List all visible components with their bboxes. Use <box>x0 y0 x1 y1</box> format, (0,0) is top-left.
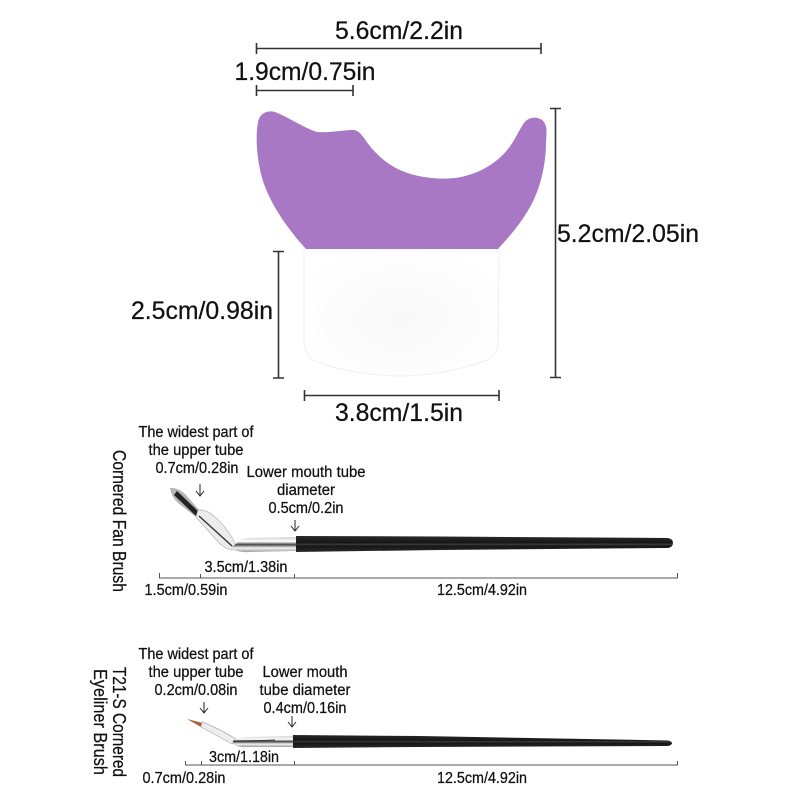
annotation: lower mouth tube, eyeliner brush: 0.4cm/0.16in <box>264 700 346 717</box>
annotation: upper tube width, fan brush: 0.7cm/0.28in <box>156 460 238 477</box>
cornered eyeliner brush illustration <box>187 719 672 748</box>
annotation: lower mouth tube, eyeliner brush: tube diameter <box>260 682 350 699</box>
handle <box>293 735 672 748</box>
dimension: base width 3.8cm: 3.8cm/1.5in <box>335 399 463 427</box>
dimension: base height 2.5cm: 2.5cm/0.98in <box>131 297 273 325</box>
angled ferrule <box>201 722 236 744</box>
annotation: upper tube width, fan brush: The widest part of <box>138 424 254 441</box>
dimension scale: eyeliner brush <box>142 749 678 787</box>
dimension scale: fan brush: 1.5cm/0.59in <box>144 582 228 599</box>
dimension scale: eyeliner brush: 12.5cm/4.92in <box>437 770 527 787</box>
straight ferrule <box>232 736 293 747</box>
dimension: total width 5.6cm <box>256 17 541 54</box>
dimension scale: fan brush: 3.5cm/1.38in <box>204 559 288 576</box>
label: Cornered Fan Brush: Cornered Fan Brush <box>109 450 129 592</box>
purple crescent <box>257 111 547 249</box>
label: T21-S Cornered Eyeliner Brush: T21-S Cornered <box>109 667 129 777</box>
bristles <box>170 488 200 517</box>
annotation: upper tube width, eyeliner brush: 0.2cm/0.08in <box>154 682 238 699</box>
annotation: lower mouth tube, fan brush: Lower mouth tube <box>246 464 366 481</box>
straight ferrule <box>230 537 296 552</box>
annotation: upper tube width, eyeliner brush: the upper tube <box>148 664 244 681</box>
annotation: lower mouth tube, eyeliner brush: Lower mouth <box>262 664 348 681</box>
purple and white eye shield <box>257 111 547 376</box>
label: T21-S Cornered Eyeliner Brush: Eyeliner Brush <box>90 669 110 775</box>
handle <box>296 536 673 552</box>
dimension: base height 2.5cm <box>131 252 284 378</box>
dimension: total height 5.2cm <box>550 108 699 378</box>
dimension: total width 5.6cm: 5.6cm/2.2in <box>335 17 463 45</box>
dimension: total height 5.2cm: 5.2cm/2.05in <box>557 220 699 248</box>
angled ferrule <box>196 510 236 550</box>
annotation: upper tube width, fan brush: the upper tube <box>148 442 244 459</box>
annotation: lower mouth tube, fan brush: 0.5cm/0.2in <box>268 500 344 517</box>
annotation: upper tube width, eyeliner brush <box>138 646 254 713</box>
label: T21-S Cornered Eyeliner Brush <box>90 667 129 777</box>
bristle tip <box>187 719 203 727</box>
cornered fan brush illustration <box>170 488 673 552</box>
annotation: upper tube width, eyeliner brush: The widest part of <box>138 646 254 663</box>
dimension: top width 1.9cm: 1.9cm/0.75in <box>234 58 376 86</box>
dimension scale: fan brush: 12.5cm/4.92in <box>437 582 527 599</box>
dimension scale: eyeliner brush: 0.7cm/0.28in <box>142 770 226 787</box>
annotation: upper tube width, fan brush <box>138 424 254 496</box>
dimension scale: eyeliner brush: 3cm/1.18in <box>209 749 279 766</box>
annotation: lower mouth tube, fan brush: diameter <box>277 482 335 499</box>
dimension scale: fan brush <box>144 559 678 599</box>
dimension: base width 3.8cm <box>304 390 499 427</box>
annotation: lower mouth tube, eyeliner brush <box>260 664 350 727</box>
annotation: lower mouth tube, fan brush <box>246 464 366 531</box>
white base <box>304 249 499 376</box>
